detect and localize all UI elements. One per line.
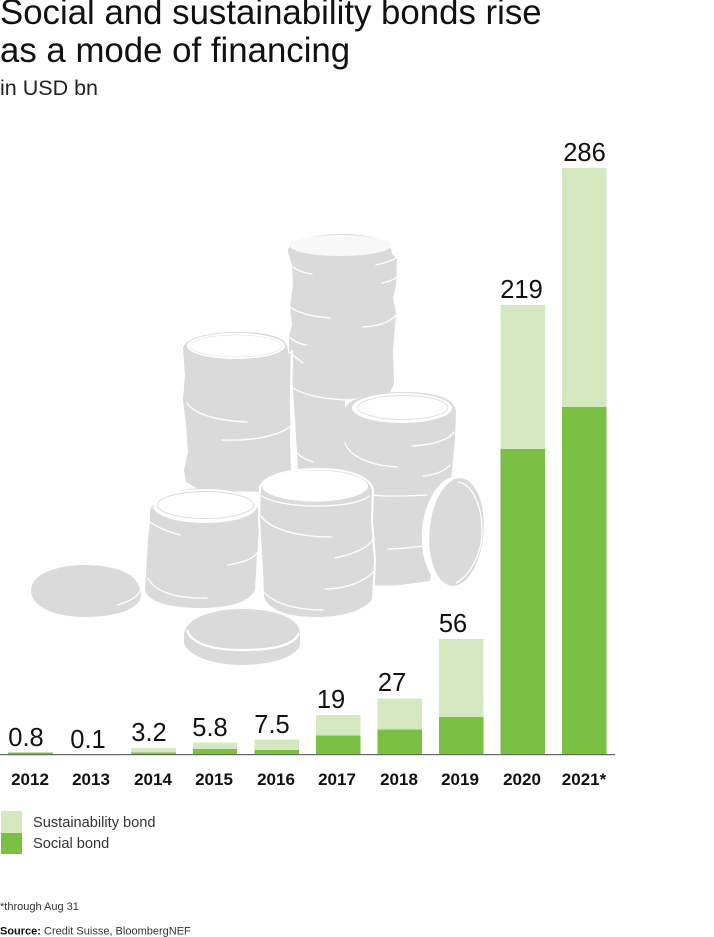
- legend: sustainability bond: Sustainability bond: [33, 815, 156, 831]
- bar: 2016: [254, 711, 299, 789]
- coin stack: front left: [145, 488, 260, 608]
- bar: 2012: [8, 724, 53, 789]
- bar: 2017: [316, 686, 360, 789]
- title: as a mode of financing: [0, 31, 350, 70]
- illustration: coin stacks: [31, 234, 491, 665]
- coin stack: back left: [183, 332, 292, 492]
- bar: 2018: 27: [378, 669, 406, 697]
- coin stack: front centre: [259, 469, 375, 618]
- bar: 2016: 7.5: [254, 711, 290, 739]
- bar: 2018: [378, 669, 422, 789]
- bar: 2012: 0.8: [8, 724, 44, 752]
- bar: 2021: 286: [563, 139, 606, 167]
- legend: social bond: Social bond: [33, 836, 109, 852]
- bar: 2019: 2019: [441, 770, 479, 789]
- coin: standing: [417, 473, 491, 591]
- legend: social bond: [1, 833, 109, 854]
- bar: 2013: [70, 726, 110, 789]
- bar: 2020: 2020: [503, 770, 541, 789]
- bar: 2014: 3.2: [131, 719, 167, 747]
- bar: 2015: 2015: [195, 770, 233, 789]
- bar: 2014: [131, 719, 176, 789]
- bar: 2013: 2013: [72, 770, 110, 789]
- bar: 2013: 0.1: [70, 726, 106, 754]
- title: [0, 0, 542, 70]
- coin: flat bottom: [184, 609, 300, 665]
- bar: 2018: 2018: [380, 770, 418, 789]
- bar: 2021: 2021*: [562, 770, 607, 789]
- bar: 2020: 219: [500, 276, 543, 304]
- bar: 2017: 19: [317, 686, 345, 714]
- bar: 2017: 2017: [318, 770, 356, 789]
- bar: 2012: 2012: [11, 770, 49, 789]
- coin: flat left: [31, 565, 141, 617]
- x axis: [0, 754, 615, 755]
- bar chart: [0, 139, 615, 789]
- bar: 2021: [562, 139, 607, 789]
- bar: 2019: 56: [439, 610, 467, 638]
- coin stack: tall back: [288, 234, 397, 470]
- legend: [1, 811, 156, 854]
- footnote: *through Aug 31: [0, 901, 79, 913]
- legend: sustainability bond: [1, 811, 156, 833]
- bar: 2015: [192, 714, 237, 789]
- bar: 2019: [439, 610, 484, 789]
- subtitle: in USD bn: [0, 76, 98, 100]
- coin stack: right: [340, 392, 456, 586]
- bar: 2016: 2016: [257, 770, 295, 789]
- bar: 2015: 5.8: [192, 714, 228, 742]
- bar: 2014: 2014: [134, 770, 172, 789]
- bar: 2020: [500, 276, 545, 789]
